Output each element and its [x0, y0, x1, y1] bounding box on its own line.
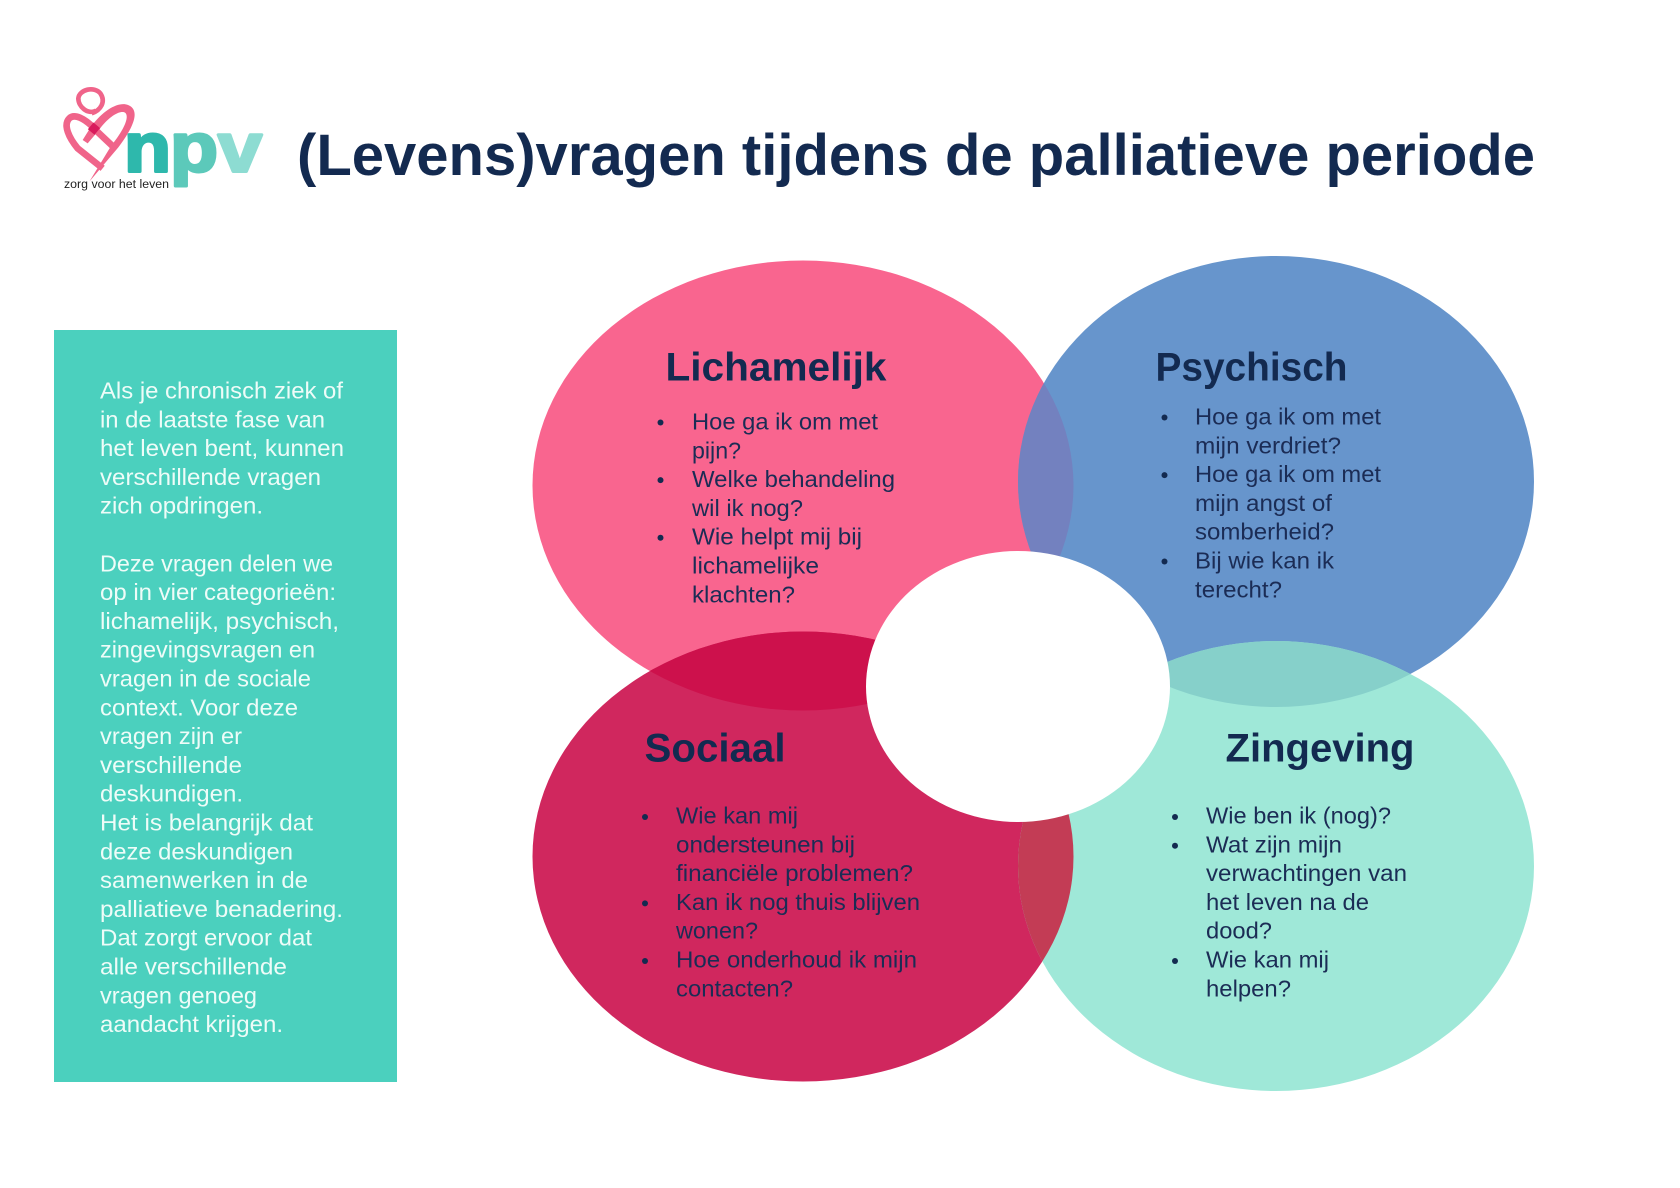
logo letter v: v [218, 108, 262, 186]
heading: Psychisch: Psychisch [1156, 346, 1348, 390]
bullet list: Psychisch: Hoe ga ik om met [1195, 461, 1381, 487]
bullet list: Sociaal: Kan ik nog thuis blijven [676, 889, 920, 915]
title: (Levens)vragen tijdens de palliatieve periode [297, 123, 1535, 188]
panel: introduction [54, 330, 397, 1082]
heading: Zingeving: Zingeving [1226, 726, 1414, 770]
intro text block: in de laatste fase van [100, 406, 325, 432]
bullet list: Sociaal: Hoe onderhoud ik mijn [676, 946, 917, 972]
bullet list: Psychisch: Bij wie kan ik [1195, 548, 1334, 574]
panel: Psychisch [1156, 346, 1381, 602]
intro text block: Het is belangrijk dat [100, 810, 313, 836]
bullet list: Sociaal: financiële problemen? [676, 860, 913, 886]
bullet list: Zingeving: verwachtingen van [1206, 860, 1407, 886]
bullet list: Psychisch [1162, 404, 1381, 602]
infographic canvas [54, 87, 1534, 1091]
bullet list: Psychisch: mijn verdriet? [1195, 432, 1341, 458]
bullet list: Sociaal: ondersteunen bij [676, 831, 855, 857]
bullet list: Lichamelijk: lichamelijke [692, 552, 819, 578]
intro text block: Deze vragen delen we [100, 550, 333, 576]
intro text block: deze deskundigen [100, 838, 293, 864]
intro text block: het leven bent, kunnen [100, 435, 344, 461]
intro text block: alle verschillende [100, 954, 287, 980]
logo letter n: n [124, 108, 171, 186]
intro text block: verschillende [100, 752, 242, 778]
bullet list: Sociaal: wonen? [675, 918, 758, 944]
bullet list: Zingeving: Wie ben ik (nog)? [1206, 802, 1391, 828]
heading: Lichamelijk: Lichamelijk [666, 346, 887, 390]
panel: Sociaal [642, 726, 920, 1001]
venn diagram circles [532, 256, 1534, 1091]
intro text block: vragen zijn er [100, 723, 242, 749]
bullet list: Zingeving: helpen? [1206, 975, 1291, 1001]
intro text block: samenwerken in de [100, 867, 308, 893]
bullet list: Lichamelijk: Wie helpt mij bij [692, 524, 862, 550]
intro text block: palliatieve benadering. [100, 896, 343, 922]
intro text block: Als je chronisch ziek of [100, 378, 343, 404]
bullet list: Psychisch: terecht? [1195, 576, 1282, 602]
intro text block: deskundigen. [100, 781, 243, 807]
intro text block: Dat zorgt ervoor dat [100, 925, 312, 951]
intro text block: aandacht krijgen. [100, 1011, 283, 1037]
bullet list: Lichamelijk [658, 408, 895, 607]
intro text block: op in vier categorieën: [100, 579, 336, 605]
intro text block: zich opdringen. [100, 493, 263, 519]
intro text block [100, 378, 344, 1037]
bullet list: Sociaal [642, 802, 920, 1001]
heading: Sociaal: Sociaal [644, 726, 786, 770]
panel: Zingeving [1172, 726, 1414, 1001]
bullet list: Zingeving [1172, 802, 1407, 1001]
intro text block: lichamelijk, psychisch, [100, 608, 339, 634]
bullet list: Lichamelijk: klachten? [692, 581, 795, 607]
bullet list: Psychisch: mijn angst of [1195, 490, 1332, 516]
bullet list: Psychisch: somberheid? [1195, 519, 1334, 545]
bullet list: Zingeving: Wie kan mij [1206, 946, 1329, 972]
bullet list: Sociaal: contacten? [676, 975, 793, 1001]
bullet list: Zingeving: dood? [1206, 918, 1272, 944]
bullet list: Zingeving: het leven na de [1206, 889, 1369, 915]
intro text block: verschillende vragen [100, 464, 321, 490]
bullet list: Lichamelijk: Hoe ga ik om met [692, 408, 878, 434]
bullet list: Lichamelijk: pijn? [692, 437, 741, 463]
intro text block: context. Voor deze [100, 694, 298, 720]
logo letter p: p [170, 108, 218, 186]
bullet list: Psychisch: Hoe ga ik om met [1195, 404, 1381, 430]
bullet list: Zingeving: Wat zijn mijn [1206, 831, 1342, 857]
logo tagline: zorg voor het leven [64, 179, 169, 191]
panel: Lichamelijk [658, 346, 895, 607]
intro text block: vragen genoeg [100, 982, 257, 1008]
bullet list: Sociaal: Wie kan mij [676, 802, 798, 828]
icon: person and heart [67, 89, 135, 182]
intro text block: zingevingsvragen en [100, 637, 315, 663]
intro text block: vragen in de sociale [100, 666, 311, 692]
bullet list: Lichamelijk: Welke behandeling [692, 466, 895, 492]
center white ellipse [866, 551, 1170, 822]
logo: npv heart [64, 89, 262, 191]
bullet list: Lichamelijk: wil ik nog? [691, 495, 803, 521]
